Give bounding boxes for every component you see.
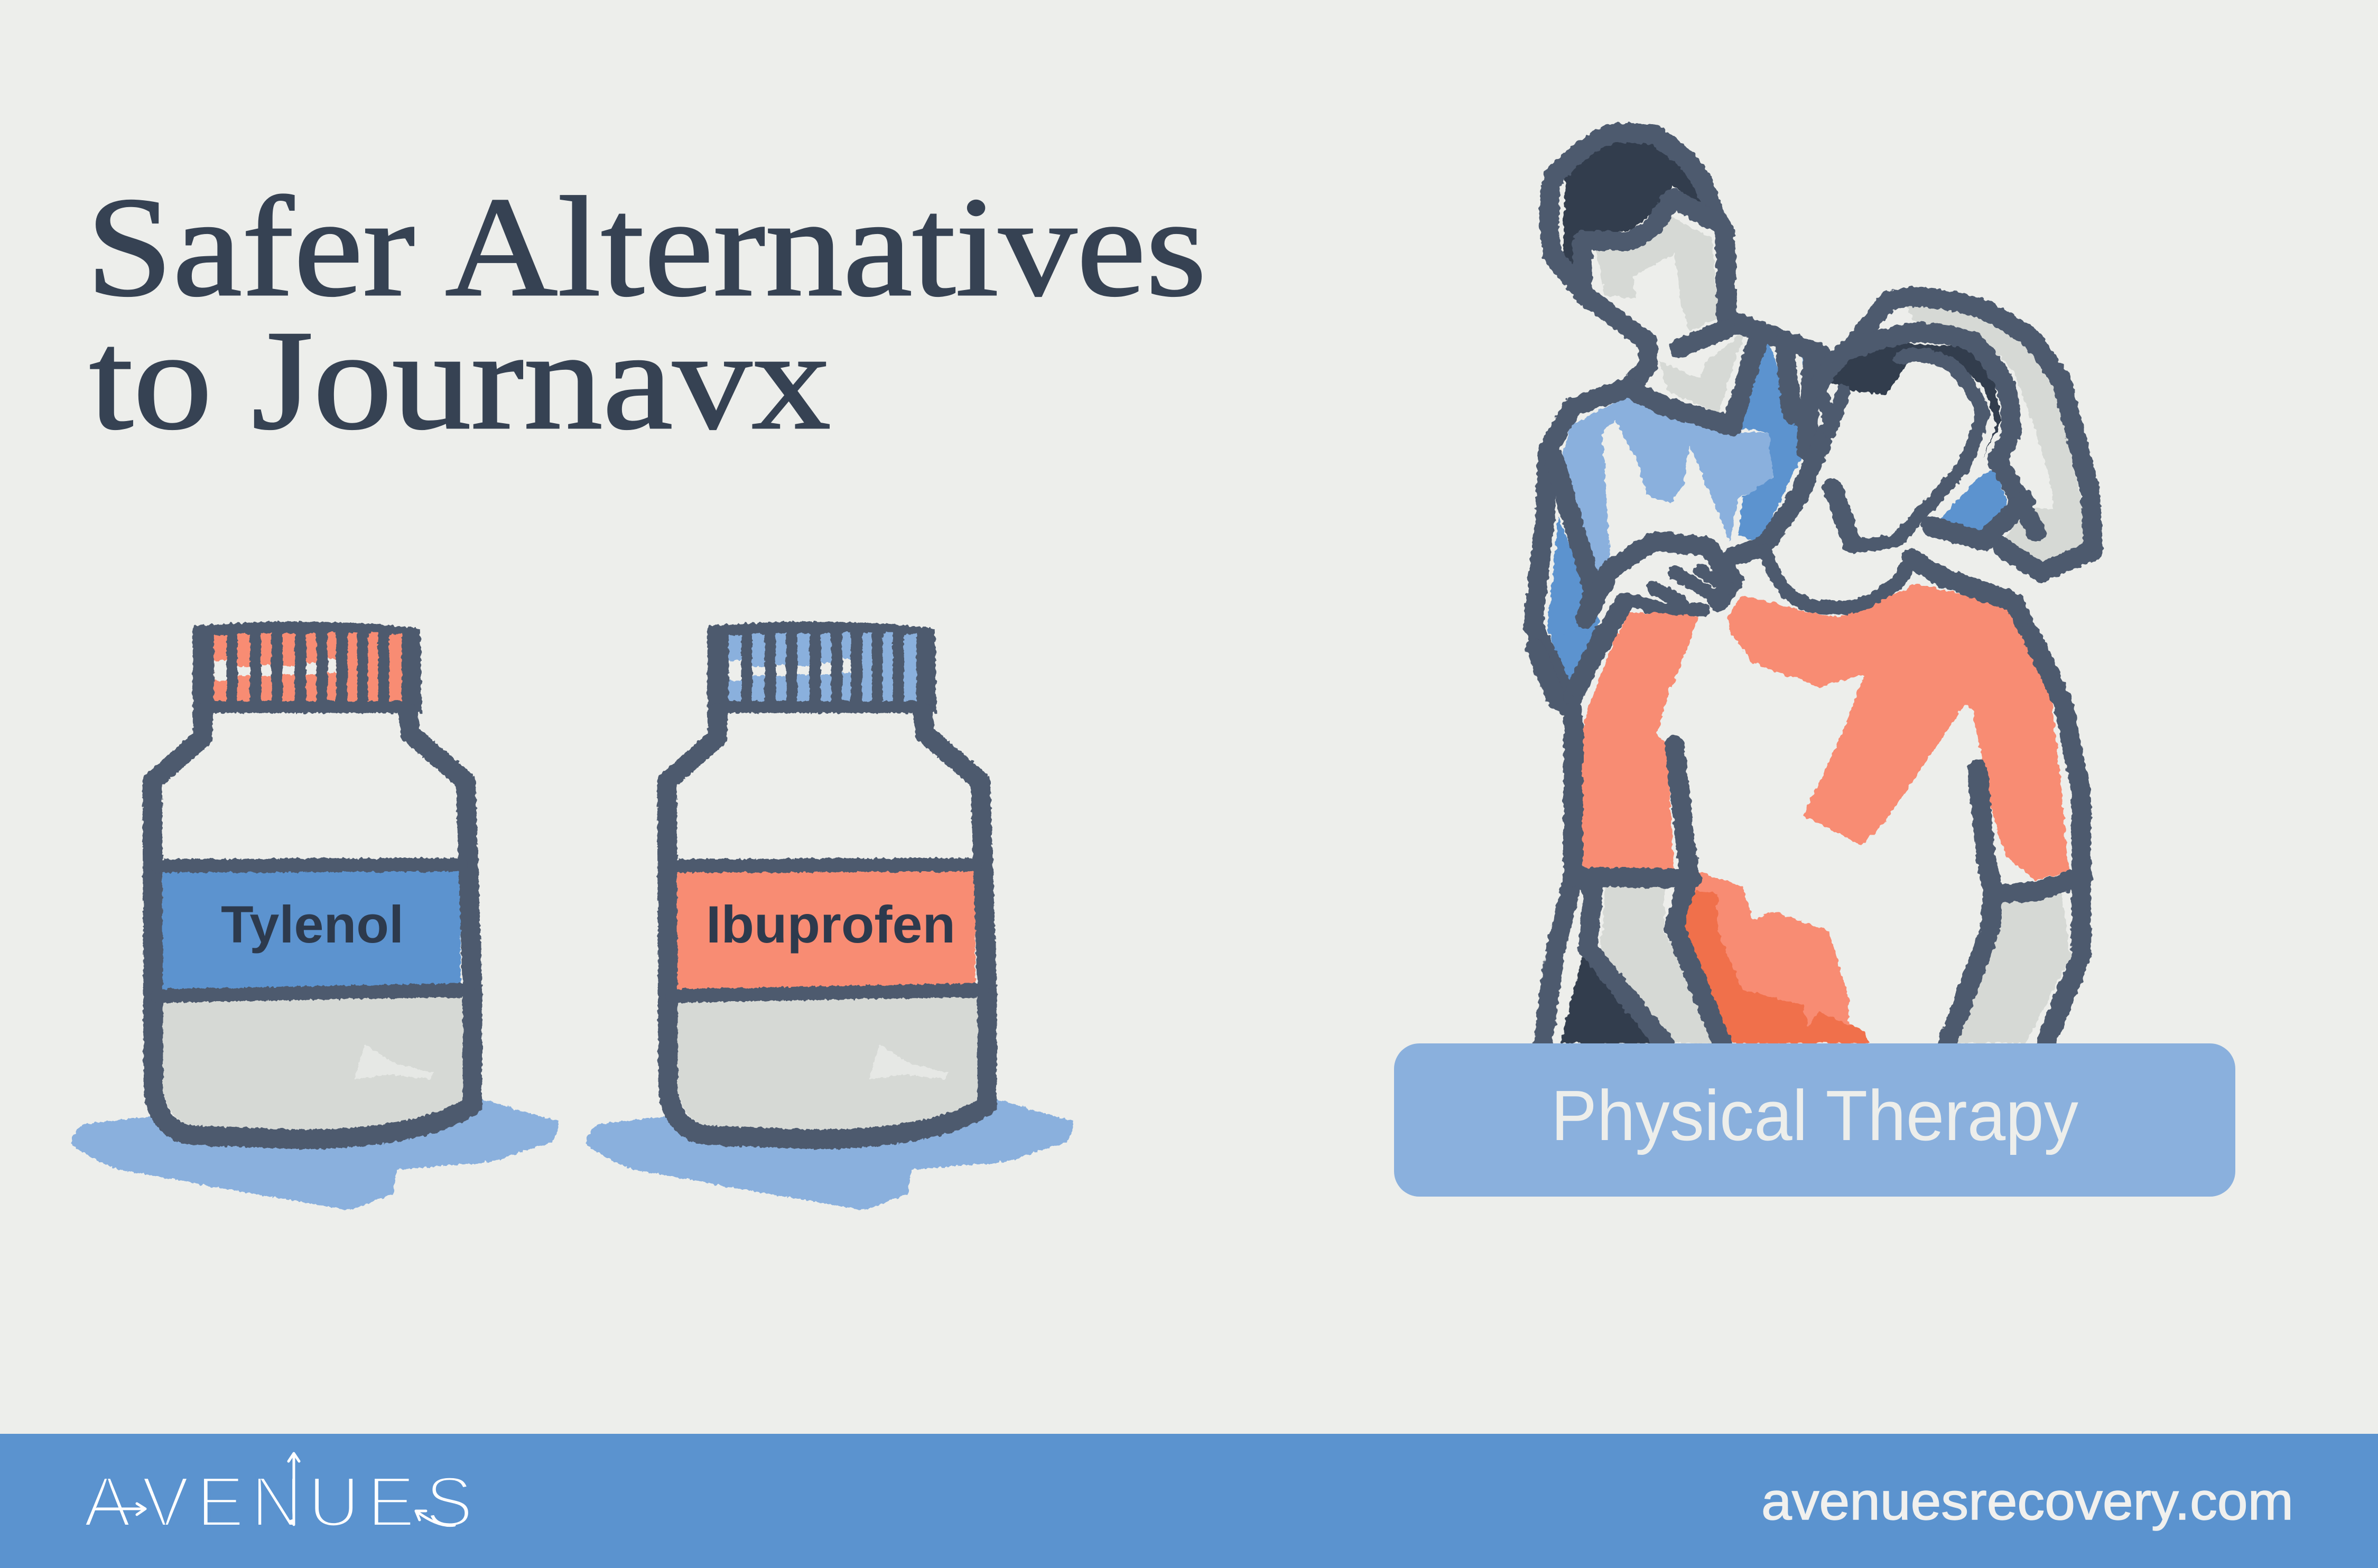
label text: Tylenol — [221, 895, 404, 954]
arm outlines — [1573, 712, 1664, 1043]
bottom fill — [162, 996, 467, 1135]
logo: AVENUES — [83, 1462, 473, 1542]
bottle body fill — [152, 709, 472, 1140]
illustration: physical therapy figures — [1533, 133, 2093, 1043]
lower torso dark fill — [1550, 634, 1601, 689]
hair — [1563, 137, 1707, 265]
neck shading — [1659, 332, 1745, 413]
collar — [1629, 332, 1760, 426]
label text: Ibuprofen — [706, 895, 955, 954]
forearms — [1601, 886, 1717, 1043]
caption box — [1394, 1043, 2235, 1197]
shadow — [586, 1099, 1073, 1210]
shadow — [71, 1099, 559, 1210]
patient face fill — [1830, 358, 1984, 547]
raised arm outline — [1852, 296, 2093, 573]
footer bar — [0, 1434, 2378, 1568]
title — [86, 168, 1206, 459]
bottle outline — [667, 713, 987, 1140]
hand on shoulder — [1585, 541, 1734, 619]
cap — [708, 621, 936, 713]
cap stripes — [729, 632, 916, 701]
bottle: Ibuprofen — [586, 621, 1073, 1210]
shirt sleeves and chest — [1578, 634, 1692, 871]
bottle outline — [152, 713, 472, 1140]
patient neck fill — [1769, 514, 1911, 606]
label band — [677, 871, 976, 990]
shirt upper — [1727, 584, 2045, 687]
bottle body fill — [667, 709, 987, 1140]
label band — [162, 871, 461, 990]
cap — [193, 621, 422, 713]
head outlines — [1817, 332, 2011, 461]
caption text: Physical Therapy — [1551, 1076, 2078, 1155]
bottom fill — [677, 996, 982, 1135]
bottle: Tylenol — [71, 621, 559, 1210]
patient hair — [1824, 343, 2001, 458]
head outline — [1549, 133, 1727, 324]
website: avenuesrecovery.com — [1761, 1472, 2293, 1531]
torso outline — [1533, 387, 1629, 687]
shirt dark — [1738, 337, 1806, 543]
arm shading — [1905, 304, 2089, 562]
face shading — [1596, 217, 1719, 332]
shirt light — [1563, 391, 1778, 584]
figure: therapist — [1533, 133, 2093, 1043]
title: Safer Alternatives — [86, 168, 1206, 326]
title: to Journavx — [89, 301, 831, 459]
cap stripes — [214, 632, 402, 701]
shirt hem — [1682, 871, 1869, 1043]
figure: patient — [1573, 332, 2084, 1043]
